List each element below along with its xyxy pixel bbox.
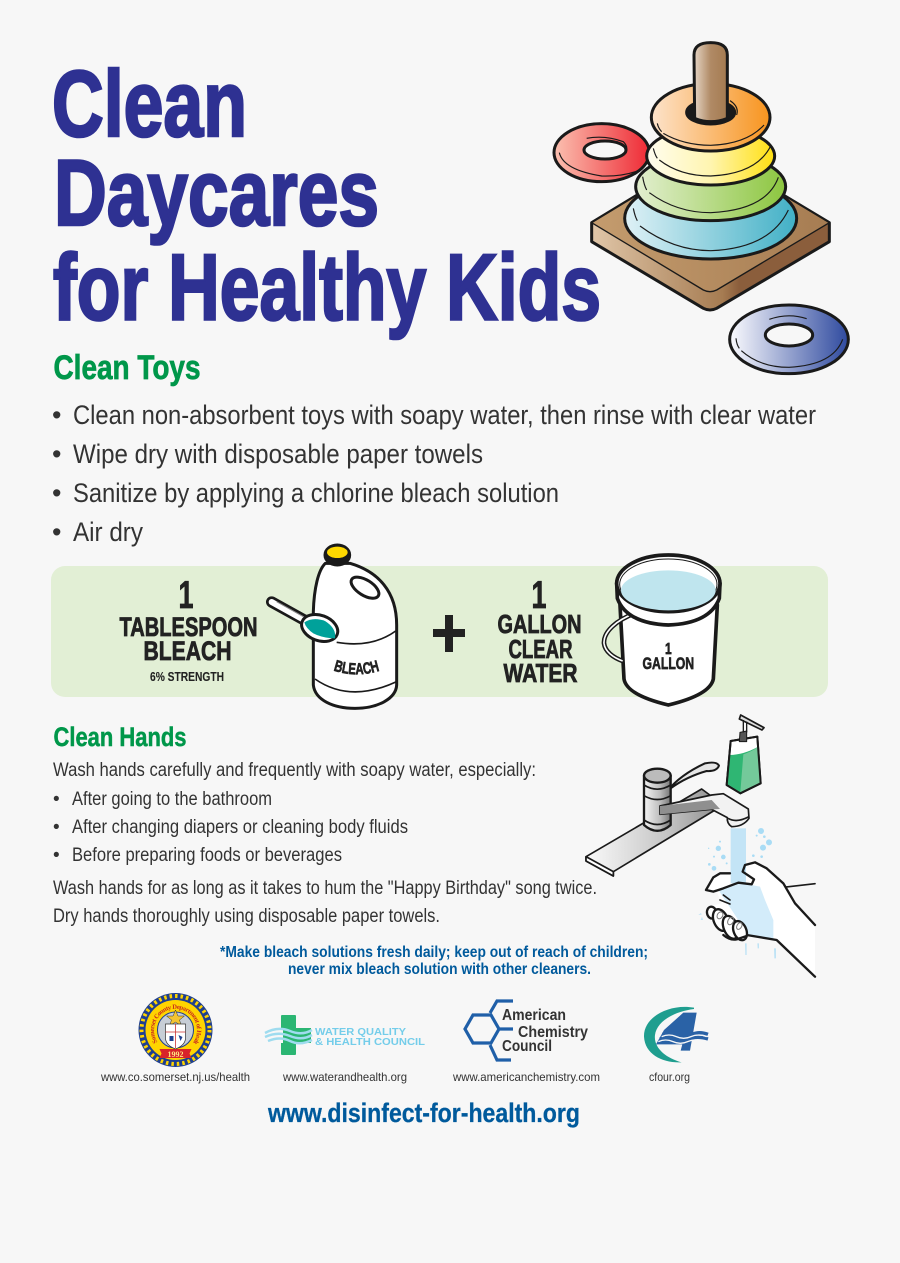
text: one tablespoon bleach: 1 <box>178 574 194 617</box>
label: 1 gallon: GALLON <box>642 654 694 673</box>
logo: Water Quality & Health Council: WATER QUALITY <box>315 1027 406 1038</box>
text: one tablespoon bleach: TABLESPOON <box>120 612 258 642</box>
red loose ring <box>554 124 649 182</box>
text: one gallon clear water: 1 <box>532 574 546 617</box>
logo: Somerset County Department of Health seal: Somerset County Department of Health <box>151 1004 202 1044</box>
text: partner websites: cfour.org <box>649 1070 690 1084</box>
text: partner websites: www.co.somerset.nj.us/health <box>100 1070 250 1084</box>
soap dispenser <box>727 715 764 793</box>
blue loose ring <box>730 305 848 374</box>
text block: hand washing guidance: Dry hands thoroughly using disposable paper towels. <box>53 906 440 927</box>
text block: hand washing guidance <box>53 760 597 927</box>
spout <box>660 794 749 827</box>
text: one gallon clear water: WATER <box>504 658 578 688</box>
text: one tablespoon bleach: BLEACH <box>144 636 232 666</box>
illustration: faucet and soap <box>586 715 772 885</box>
logo: Water Quality & Health Council: & HEALTH COUNCIL <box>315 1037 425 1048</box>
callout: bleach safety note: *Make bleach solutions fresh daily; keep out of reach of children; <box>220 944 648 961</box>
heading: clean toys: Clean Toys <box>54 349 200 387</box>
faucet plate <box>586 789 723 876</box>
label: 1 gallon: 1 <box>665 641 672 658</box>
callout: bleach safety note: never mix bleach solution with other cleaners. <box>288 961 591 978</box>
text block: hand washing guidance: After changing diapers or cleaning body fluids <box>72 817 408 838</box>
illustration: stacking ring toy <box>554 43 848 374</box>
wooden peg <box>694 43 727 122</box>
label: bleach: BLEACH <box>334 660 380 675</box>
logo: Somerset County Department of Health seal <box>138 993 212 1067</box>
text: one tablespoon bleach <box>120 574 258 684</box>
illustration: washing hands <box>698 860 815 977</box>
logo: American Chemistry Council: American <box>502 1007 566 1024</box>
panel: bleach recipe <box>51 544 828 710</box>
text block: hand washing guidance: • <box>53 817 60 838</box>
logo: Somerset County Department of Health seal: 1992 <box>168 1050 184 1059</box>
text: one gallon clear water: GALLON <box>498 609 582 639</box>
title: Daycares <box>54 140 379 245</box>
lever <box>667 763 719 791</box>
text: partner websites: www.waterandhealth.org <box>282 1070 407 1084</box>
text block: hand washing guidance: Before preparing foods or beverages <box>72 845 342 866</box>
text block: toy cleaning steps: • <box>52 517 61 547</box>
text block: toy cleaning steps: Air dry <box>73 517 143 547</box>
icon: plus <box>433 615 465 652</box>
logo: Water Quality & Health Council <box>265 1015 425 1055</box>
orange ring <box>651 84 770 151</box>
icon: bleach bottle with spoon <box>266 544 398 710</box>
logo: American Chemistry Council <box>465 1001 588 1060</box>
title: Clean <box>52 51 247 156</box>
text block: toy cleaning steps: • <box>52 439 61 469</box>
text block: hand washing guidance: • <box>53 845 60 866</box>
label: 1 gallon <box>642 641 694 673</box>
text block: toy cleaning steps: Clean non-absorbent toys with soapy water, then rinse with clear water <box>73 400 816 430</box>
text: one tablespoon bleach: 6% STRENGTH <box>150 669 224 684</box>
logo: American Chemistry Council: Council <box>502 1038 552 1055</box>
callout: bleach safety note <box>220 944 648 978</box>
text block: toy cleaning steps: • <box>52 478 61 508</box>
yellow ring <box>647 127 775 185</box>
title: for Healthy Kids <box>53 234 601 340</box>
blue ring <box>625 178 797 259</box>
text block: hand washing guidance: After going to the bathroom <box>72 789 272 810</box>
text block: toy cleaning steps: Wipe dry with disposable paper towels <box>73 439 483 469</box>
faucet body <box>644 769 671 831</box>
text: partner websites: www.americanchemistry.com <box>452 1070 600 1084</box>
heading: clean hands: Clean Hands <box>54 722 186 752</box>
text: main website: www.disinfect-for-health.org <box>267 1098 580 1128</box>
text block: hand washing guidance: Wash hands carefully and frequently with soapy water, especially: <box>53 760 536 781</box>
text block: toy cleaning steps: Sanitize by applying a chlorine bleach solution <box>73 478 559 508</box>
text block: toy cleaning steps: • <box>52 400 61 430</box>
text block: hand washing guidance: • <box>53 789 60 810</box>
wooden base <box>592 153 829 310</box>
text: partner websites <box>100 1070 690 1084</box>
running water <box>731 828 746 885</box>
water droplets <box>708 828 772 871</box>
logo: C4 cfour <box>644 1007 708 1062</box>
title <box>52 51 601 340</box>
green ring <box>636 153 786 221</box>
text block: toy cleaning steps <box>52 400 816 547</box>
icon: water bucket <box>604 555 720 705</box>
logo: American Chemistry Council: Chemistry <box>518 1024 588 1041</box>
text: one gallon clear water: CLEAR <box>508 634 573 664</box>
text: one gallon clear water <box>498 574 582 688</box>
text block: hand washing guidance: Wash hands for as long as it takes to hum the "Happy Birthday" song twice. <box>53 878 597 899</box>
